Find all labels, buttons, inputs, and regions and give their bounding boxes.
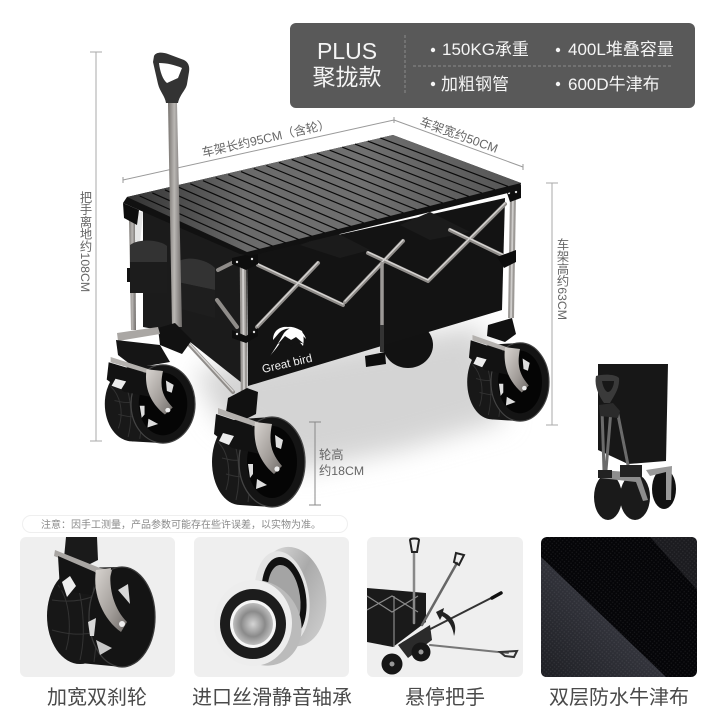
dimension: wheel height: 轮高	[319, 447, 344, 462]
feature captions: 双层防水牛津布	[549, 686, 689, 709]
panel: bearings	[194, 537, 349, 680]
front bearing	[207, 566, 317, 680]
dimension: frame height: 车架高约63CM	[555, 237, 569, 320]
folded wagon thumbnail	[594, 364, 676, 520]
floor shadow	[195, 325, 505, 470]
dimension: wheel height: 约18CM	[319, 463, 364, 478]
folded body	[598, 364, 668, 464]
wagon illustration	[105, 53, 549, 507]
specification list	[431, 40, 674, 94]
wagon side view	[367, 588, 426, 647]
handle grip	[153, 53, 189, 103]
rear bearing	[248, 542, 333, 651]
rear left pole	[129, 215, 136, 330]
measurement note	[22, 516, 348, 532]
front fabric panel	[247, 198, 505, 386]
frame brackets	[123, 185, 521, 367]
rear left wheel assembly	[105, 323, 195, 443]
cup holder: front	[177, 259, 215, 318]
bracket bolts	[236, 191, 517, 335]
front wheel assembly	[212, 388, 305, 507]
rear hidden wheel	[383, 322, 433, 368]
panel: model and specifications	[290, 23, 695, 108]
specification list: 400L堆叠容量	[568, 40, 674, 59]
wheel closeup	[47, 537, 155, 667]
folded wheels	[652, 469, 676, 509]
folded frame	[602, 410, 629, 470]
specification list: 加粗钢管	[441, 75, 509, 94]
model name: PLUS	[317, 38, 377, 64]
dimension: frame width: 车架宽约50CM	[418, 114, 500, 156]
logo: Great bird: Great bird	[261, 353, 314, 376]
panel: parking handle	[367, 537, 523, 677]
right wheel assembly	[467, 318, 549, 421]
folding wheels	[382, 625, 432, 674]
dimension: frame height	[546, 183, 569, 425]
dimension: frame length: 车架长约95CM（含轮）	[200, 116, 332, 160]
model name	[312, 38, 382, 90]
dimension: handle height	[78, 52, 102, 441]
rotation arrow	[436, 608, 455, 636]
handle pole	[168, 103, 182, 327]
dimension: frame width	[394, 114, 523, 170]
specification list: 150KG承重	[442, 40, 529, 59]
panel: brake wheel	[20, 537, 175, 677]
model name: 聚拢款	[312, 64, 382, 90]
panel: oxford fabric	[541, 537, 697, 677]
table top	[123, 135, 521, 256]
dimension: handle height: 把手离地约108CM	[78, 191, 92, 292]
specification list: 600D牛津布	[568, 75, 660, 94]
feature captions: 加宽双刹轮	[47, 686, 147, 709]
frame poles and braces	[187, 195, 513, 395]
feature captions: 悬停把手	[405, 686, 485, 709]
measurement note: 注意：因手工测量，产品参数可能存在些许误差，以实物为准。	[41, 518, 321, 531]
cup holder: rear	[127, 241, 167, 293]
side fabric panel	[143, 207, 247, 387]
feature captions	[47, 686, 689, 709]
logo: Great bird	[261, 327, 314, 376]
handle positions	[403, 538, 517, 657]
dimension: wheel height	[309, 422, 364, 505]
feature captions: 进口丝滑静音轴承	[192, 686, 352, 709]
dimension: frame length	[123, 116, 394, 183]
